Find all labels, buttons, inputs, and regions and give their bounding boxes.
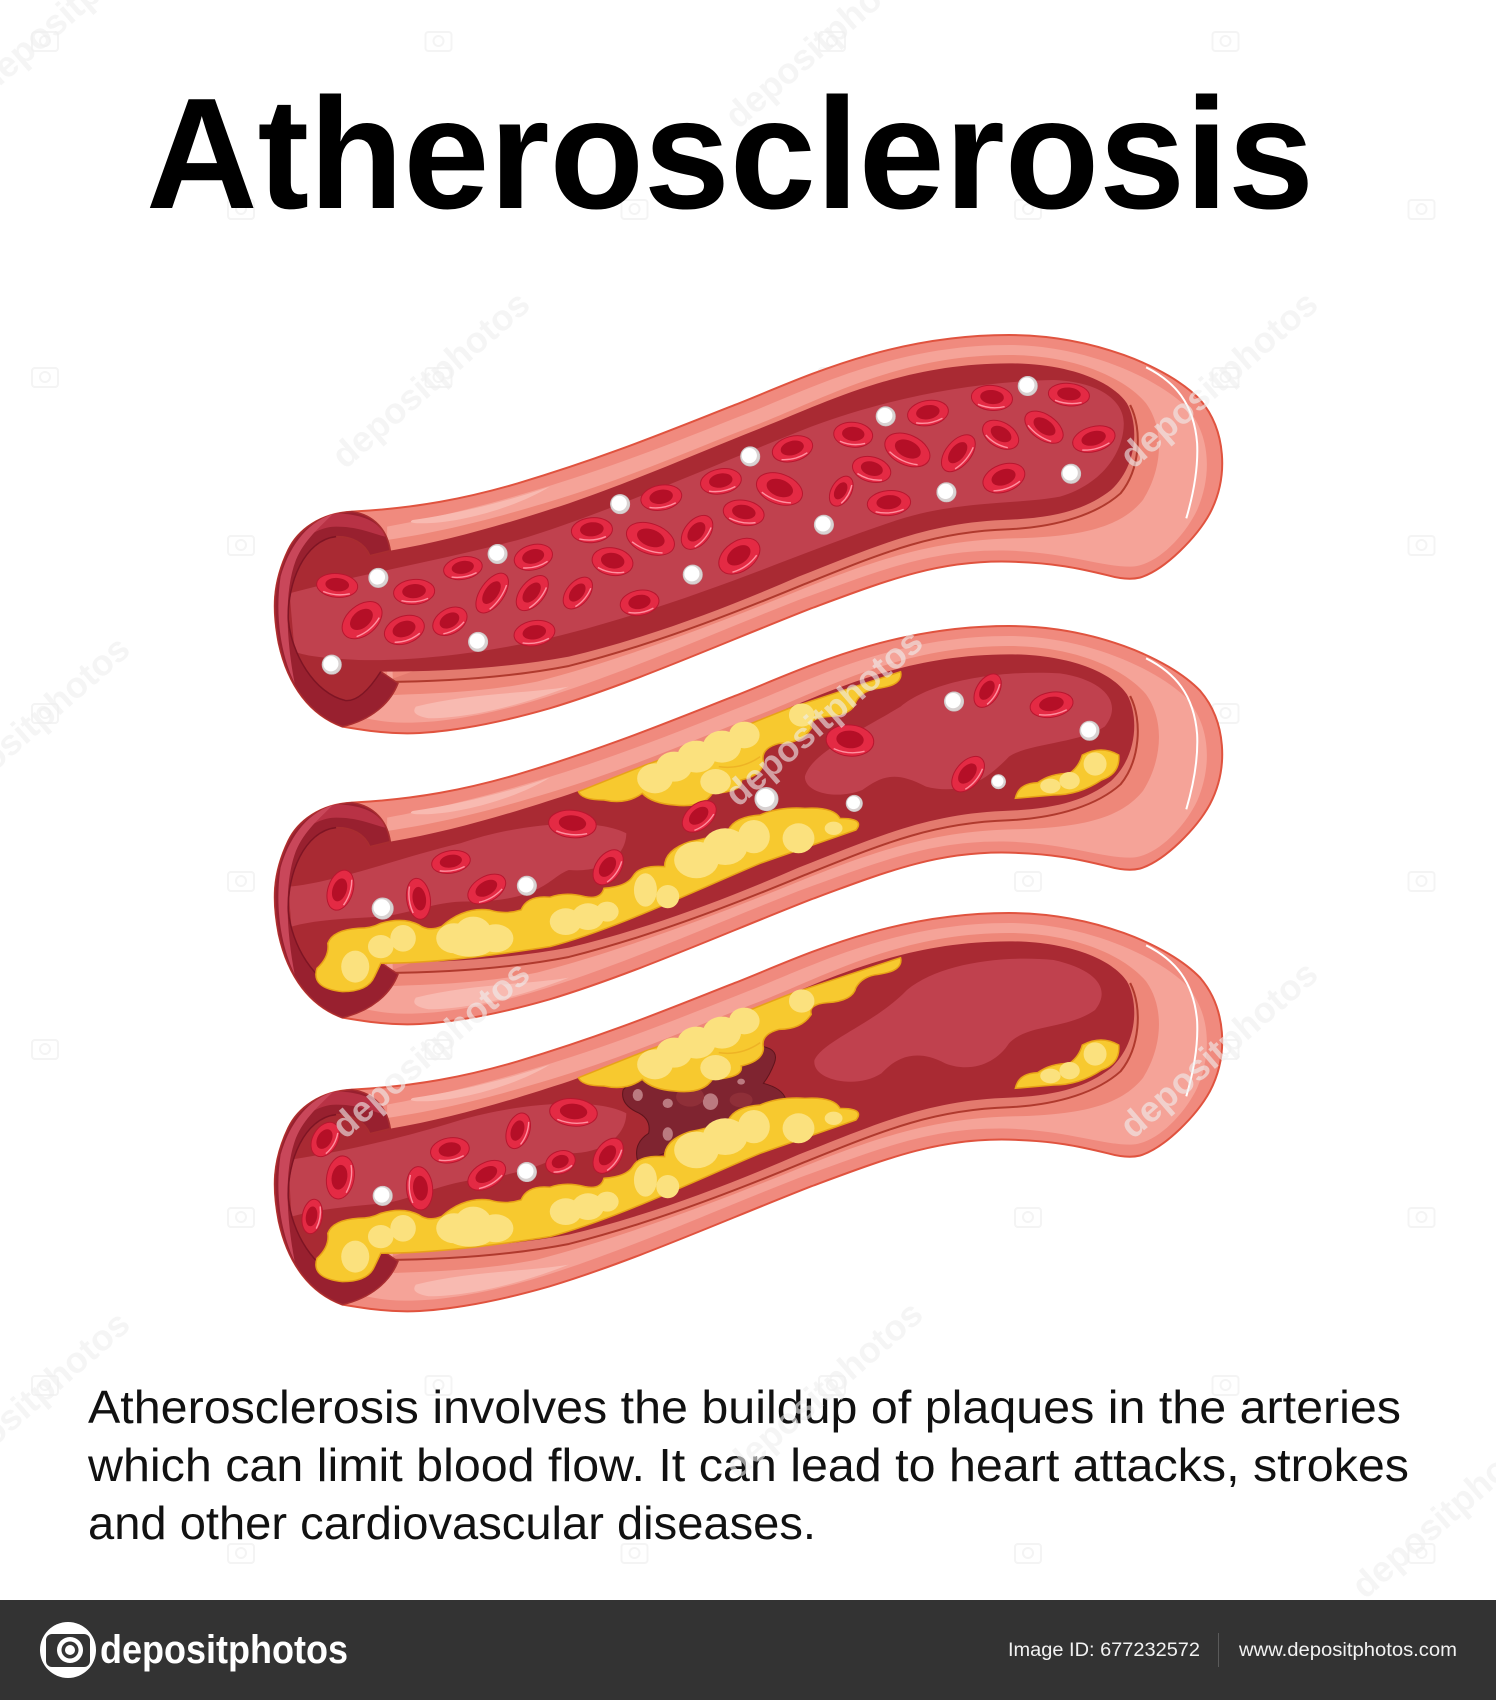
logo wordmark: depositphotos <box>100 1628 348 1672</box>
watermarks: depositphotos <box>716 620 930 814</box>
vessel opening ring <box>275 512 398 727</box>
watermarks: depositphotos <box>716 1292 930 1486</box>
watermarks: depositphotos <box>1111 952 1325 1146</box>
watermarks: depositphotos <box>323 282 537 476</box>
watermarks: depositphotos <box>323 952 537 1146</box>
vessel opening ring <box>275 1090 398 1305</box>
title: Atherosclerosis <box>146 66 1314 242</box>
logo icon: camera <box>40 1622 96 1678</box>
watermarks: depositphotos <box>1111 282 1325 476</box>
artery 2: plaque buildup <box>275 626 1222 1024</box>
artery 3: plaque with blood clot <box>275 913 1222 1311</box>
blood clot <box>623 1045 786 1162</box>
red and white blood cells <box>299 1097 630 1235</box>
description text: and other cardiovascular diseases. <box>88 1497 816 1549</box>
vessel wall and lumen <box>275 913 1222 1311</box>
yellow plaque deposits <box>316 958 1119 1282</box>
vessel wall and lumen <box>275 626 1222 1024</box>
healthy blood flow band <box>290 380 1124 660</box>
footer bar <box>0 1600 1496 1700</box>
yellow plaque deposits <box>316 672 1119 992</box>
vessel wall and lumen <box>275 335 1222 733</box>
description text <box>87 1381 1409 1549</box>
artery 1: healthy vessel <box>275 335 1222 733</box>
website: www.depositphotos.com <box>1238 1640 1457 1661</box>
vessel opening ring <box>275 803 398 1018</box>
red and white blood cells <box>316 376 1118 674</box>
description text: which can limit blood flow. It can lead to heart attacks, strokes <box>87 1439 1409 1491</box>
blood flow patches <box>288 959 1102 1217</box>
image id: Image ID: 677232572 <box>1008 1640 1200 1661</box>
description text: Atherosclerosis involves the buildup of plaques in the arteries <box>88 1381 1401 1433</box>
blood flow patches <box>288 673 1112 927</box>
red and white blood cells <box>322 669 1099 921</box>
